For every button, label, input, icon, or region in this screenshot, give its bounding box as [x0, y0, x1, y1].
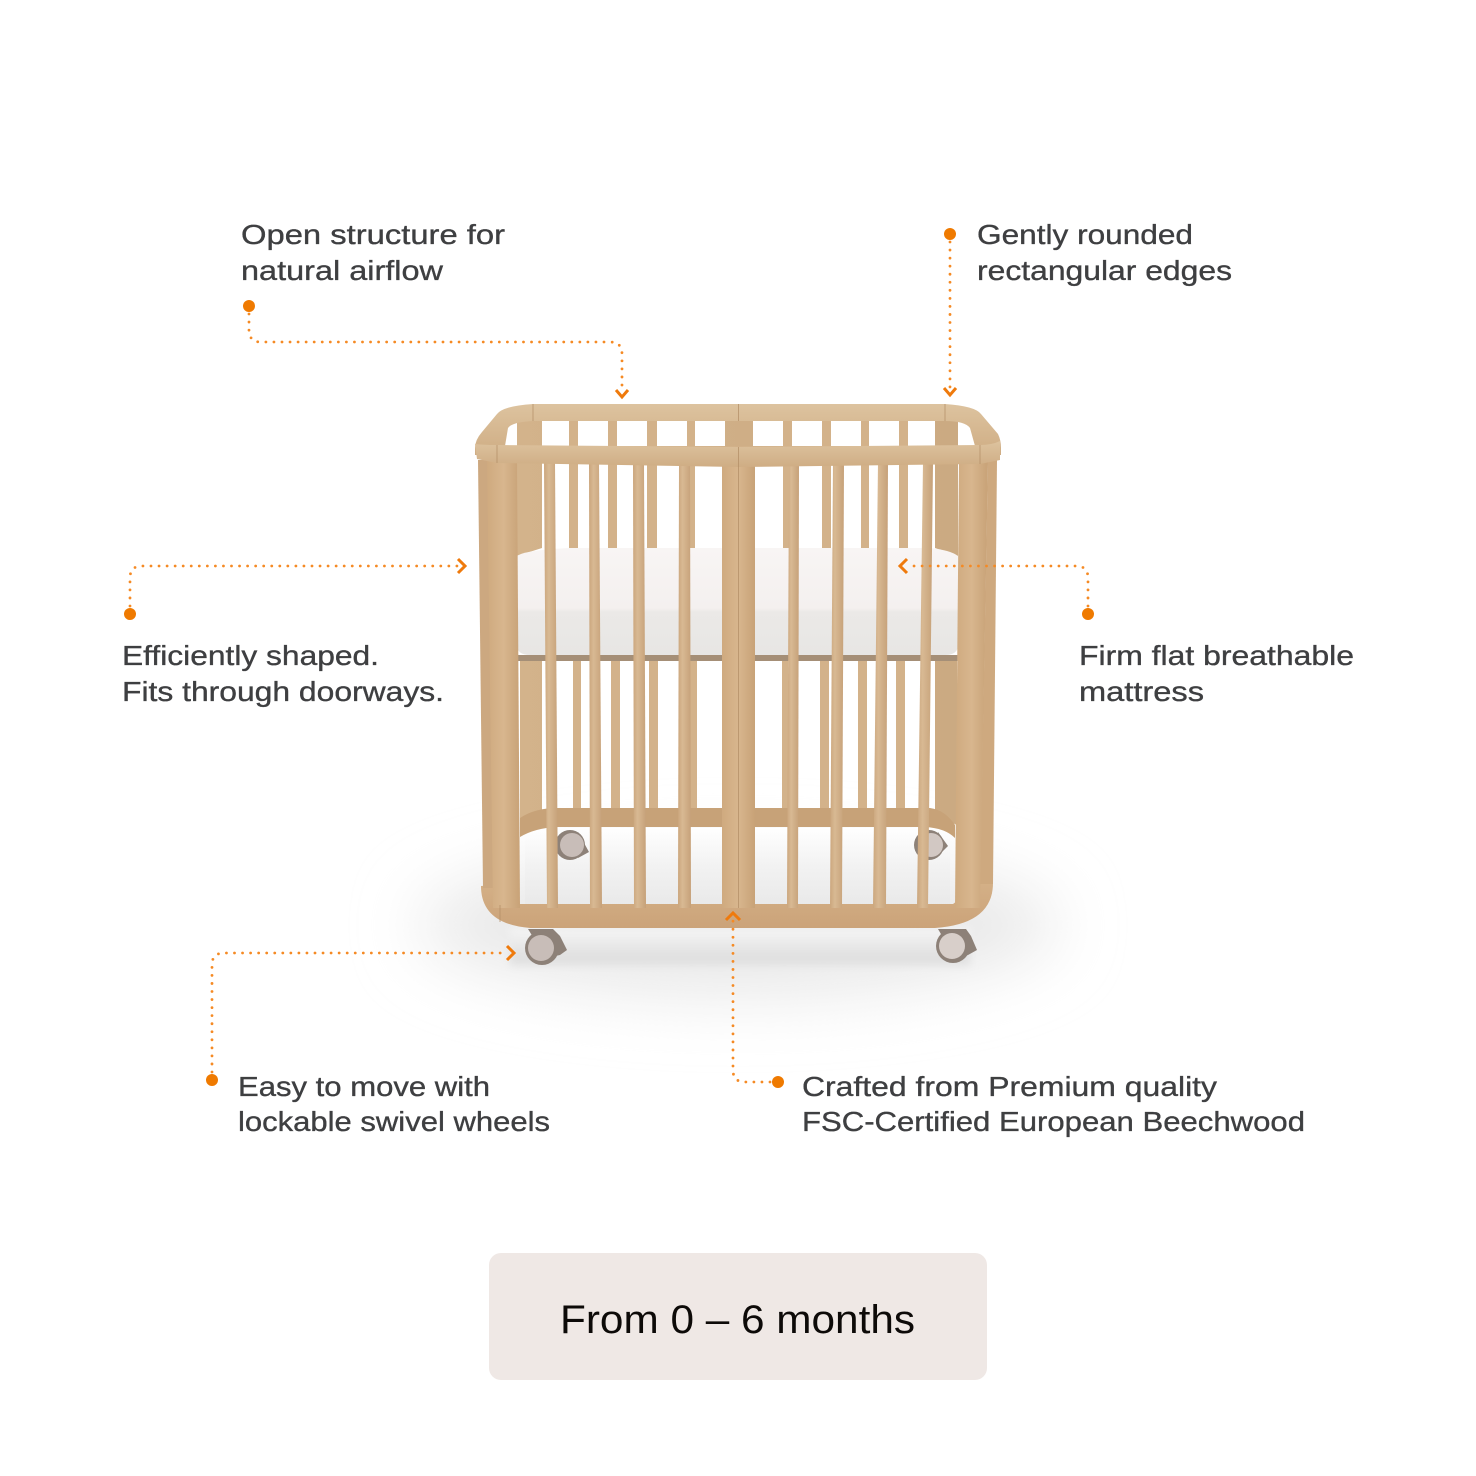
label text: rectangular edges — [977, 255, 1232, 286]
age range badge — [489, 1253, 987, 1380]
label text: Firm flat breathable — [1079, 640, 1354, 671]
back posts and slats — [517, 420, 958, 825]
label text: Crafted from Premium quality — [802, 1071, 1217, 1102]
label text — [122, 640, 444, 707]
label text: FSC-Certified European Beechwood — [802, 1106, 1305, 1137]
callout: rounded edges — [944, 219, 1232, 395]
callout: beechwood — [726, 913, 1305, 1137]
callout: efficiently shaped — [122, 559, 465, 707]
label text — [238, 1071, 550, 1137]
back wheels — [555, 830, 948, 860]
callout: open structure — [241, 219, 628, 397]
callout: wheels — [206, 946, 550, 1137]
label text: lockable swivel wheels — [238, 1106, 550, 1137]
top rail ring — [475, 404, 1001, 455]
label text: Open structure for — [241, 219, 505, 250]
callout: mattress — [900, 559, 1354, 707]
leader arrow — [124, 559, 465, 620]
label text: Efficiently shaped. — [122, 640, 379, 671]
label text — [241, 219, 505, 286]
leader arrow — [206, 946, 514, 1086]
label text: mattress — [1079, 676, 1204, 707]
floor shadow — [418, 828, 1058, 997]
leader arrow — [944, 228, 956, 395]
bottom frame rail — [481, 883, 993, 928]
front wheels — [525, 929, 977, 965]
age range badge: From 0 – 6 months — [560, 1298, 915, 1342]
leader arrow — [243, 300, 628, 397]
crib illustration — [418, 404, 1058, 997]
label text: Easy to move with — [238, 1071, 490, 1102]
label text — [802, 1071, 1305, 1137]
lower back rail — [520, 808, 955, 838]
label text — [1079, 640, 1354, 707]
label text: natural airflow — [241, 255, 444, 286]
front posts — [478, 460, 997, 908]
leader arrow — [726, 913, 784, 1088]
front slats — [544, 462, 933, 908]
label text — [977, 219, 1232, 286]
leader arrow — [900, 559, 1094, 620]
mattress — [517, 548, 958, 661]
label text: Gently rounded — [977, 219, 1193, 250]
label text: Fits through doorways. — [122, 676, 444, 707]
front top rail — [475, 441, 1000, 467]
